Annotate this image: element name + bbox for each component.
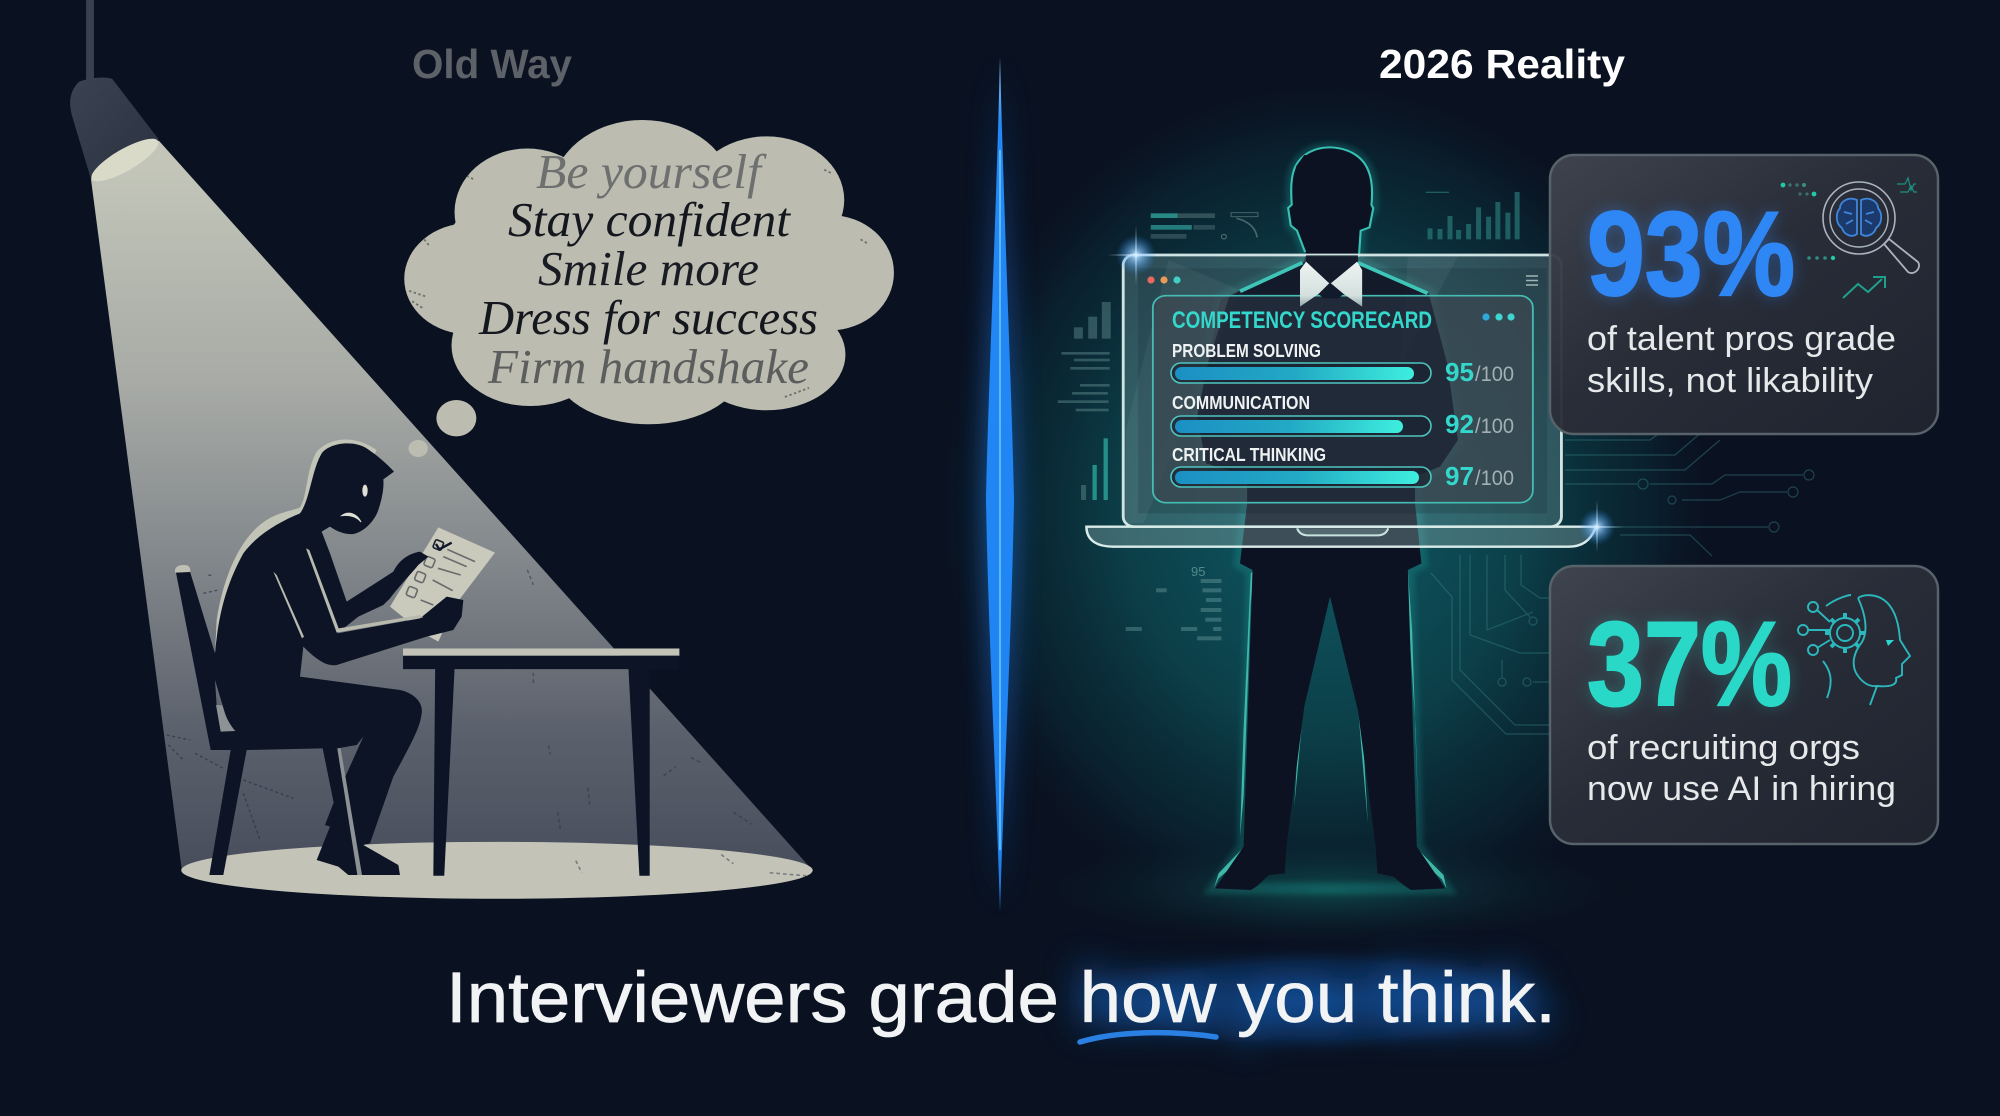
metric: problem solving <box>1171 341 1514 387</box>
worried eye <box>362 485 368 497</box>
lamp cord <box>86 0 94 82</box>
heading: 2026 reality: 2026 Reality <box>1379 41 1625 87</box>
metric: critical thinking: CRITICAL THINKING <box>1172 445 1326 465</box>
faint data label: 95 <box>1191 564 1205 579</box>
stat card: 37%: of recruiting orgs <box>1587 729 1860 767</box>
floor scratches near chair <box>167 575 293 840</box>
figure aura <box>1197 148 1458 888</box>
metric: problem solving: 95 <box>1445 357 1474 387</box>
cloud advice text: Dress for success <box>478 290 818 345</box>
stat card: 93%: 93% <box>1587 187 1795 321</box>
stat card: 37% <box>1550 566 1938 844</box>
metric: critical thinking: /100 <box>1475 467 1514 490</box>
metric: communication: 92 <box>1445 409 1474 439</box>
desk top <box>403 648 679 656</box>
floor glow <box>1000 830 1660 950</box>
heading: old way: Old Way <box>412 41 572 87</box>
rim light slivers <box>1214 570 1446 888</box>
arm highlight <box>306 548 423 633</box>
lamp lens <box>86 131 163 189</box>
light beam <box>91 141 812 870</box>
scorecard menu dots <box>1482 313 1515 321</box>
window dots <box>1147 276 1181 284</box>
laptop screen <box>1123 255 1561 527</box>
cloud advice text <box>478 144 818 394</box>
chair leg sliver <box>337 748 362 875</box>
panel: old way <box>70 0 894 899</box>
cloud advice text: Firm handshake <box>487 339 809 394</box>
shoulder rim <box>1240 263 1427 293</box>
sparkle: laptop top left <box>1107 225 1165 285</box>
metric: critical thinking: 97 <box>1445 461 1474 491</box>
metric: problem solving: PROBLEM SOLVING <box>1172 341 1321 361</box>
sparkle: laptop corner <box>1572 500 1624 552</box>
scratches <box>527 570 806 876</box>
seated figure scene <box>167 439 495 875</box>
chair cap <box>175 565 190 573</box>
circuit lines <box>1431 415 1814 734</box>
cloud wear marks <box>409 170 868 397</box>
chair seat gap <box>216 705 244 732</box>
tagline highlight glow: how you think. <box>1080 959 1552 1038</box>
metric: problem solving: /100 <box>1475 363 1514 386</box>
stat card: 37%: now use AI in hiring <box>1587 770 1896 808</box>
thought cloud <box>404 120 894 424</box>
panel: 2026 reality <box>920 41 1938 960</box>
hair spike <box>1295 155 1317 168</box>
icon: trend arrow and dots <box>1781 178 1917 298</box>
background level bars left <box>1092 438 1108 500</box>
tagline highlight glow <box>1055 945 1585 1055</box>
frowning mouth <box>342 513 361 522</box>
torso above panel <box>1229 255 1429 297</box>
glass reflections <box>1126 257 1458 523</box>
icon: AI head with gear <box>1798 595 1910 705</box>
center divider <box>986 57 1014 912</box>
tagline underline <box>1080 1033 1216 1042</box>
stat card: 37%: 37% <box>1587 597 1792 731</box>
suit through panel <box>1197 297 1458 502</box>
background data chart left <box>1058 302 1111 500</box>
business silhouette <box>1197 148 1458 890</box>
head rim <box>1289 148 1372 257</box>
stat card: 93%: 93% <box>1587 187 1795 321</box>
checklist paper <box>390 527 495 642</box>
thought bubble small <box>408 440 428 457</box>
rim light on person <box>215 439 377 653</box>
thought bubble large <box>436 400 476 436</box>
stat card: 93%: skills, not likability <box>1587 362 1873 400</box>
laptop base <box>1086 527 1595 547</box>
stat card: 93% <box>1550 155 1938 434</box>
scorecard panel <box>1153 296 1533 503</box>
scorecard title: COMPETENCY SCORECARD <box>1172 307 1432 334</box>
tagline: Interviewers grade how you think. <box>446 959 1556 1038</box>
icon: brain magnifier <box>1823 182 1919 273</box>
necktie knot <box>1319 283 1344 298</box>
cloud advice text: Stay confident <box>508 192 791 247</box>
seated person <box>215 443 463 875</box>
metric: communication: /100 <box>1475 415 1514 438</box>
window menu icon <box>1526 276 1538 285</box>
laptop inner screen <box>1138 268 1547 513</box>
desk body <box>403 656 679 876</box>
figure layer <box>1058 148 1595 890</box>
teal glow background <box>920 60 1730 960</box>
background data bars top left <box>1151 213 1258 239</box>
laptop notch <box>1297 528 1388 535</box>
lamp shade <box>70 78 159 179</box>
background data rows lower left <box>1126 579 1221 640</box>
floor light pool <box>181 842 813 899</box>
chair <box>176 572 357 875</box>
metric: communication: COMMUNICATION <box>1172 393 1310 413</box>
stat card: 93%: of talent pros grade <box>1587 320 1896 358</box>
cloud advice text: Be yourself <box>536 144 767 199</box>
cloud advice text: Smile more <box>538 241 759 296</box>
metric: communication <box>1171 393 1514 439</box>
metric: critical thinking <box>1171 445 1514 491</box>
shirt collar <box>1300 262 1362 307</box>
background data chart top right <box>1426 192 1520 239</box>
torso highlight <box>273 572 304 638</box>
stat card: 37%: 37% <box>1587 597 1792 731</box>
spotlight illustration <box>70 0 894 899</box>
